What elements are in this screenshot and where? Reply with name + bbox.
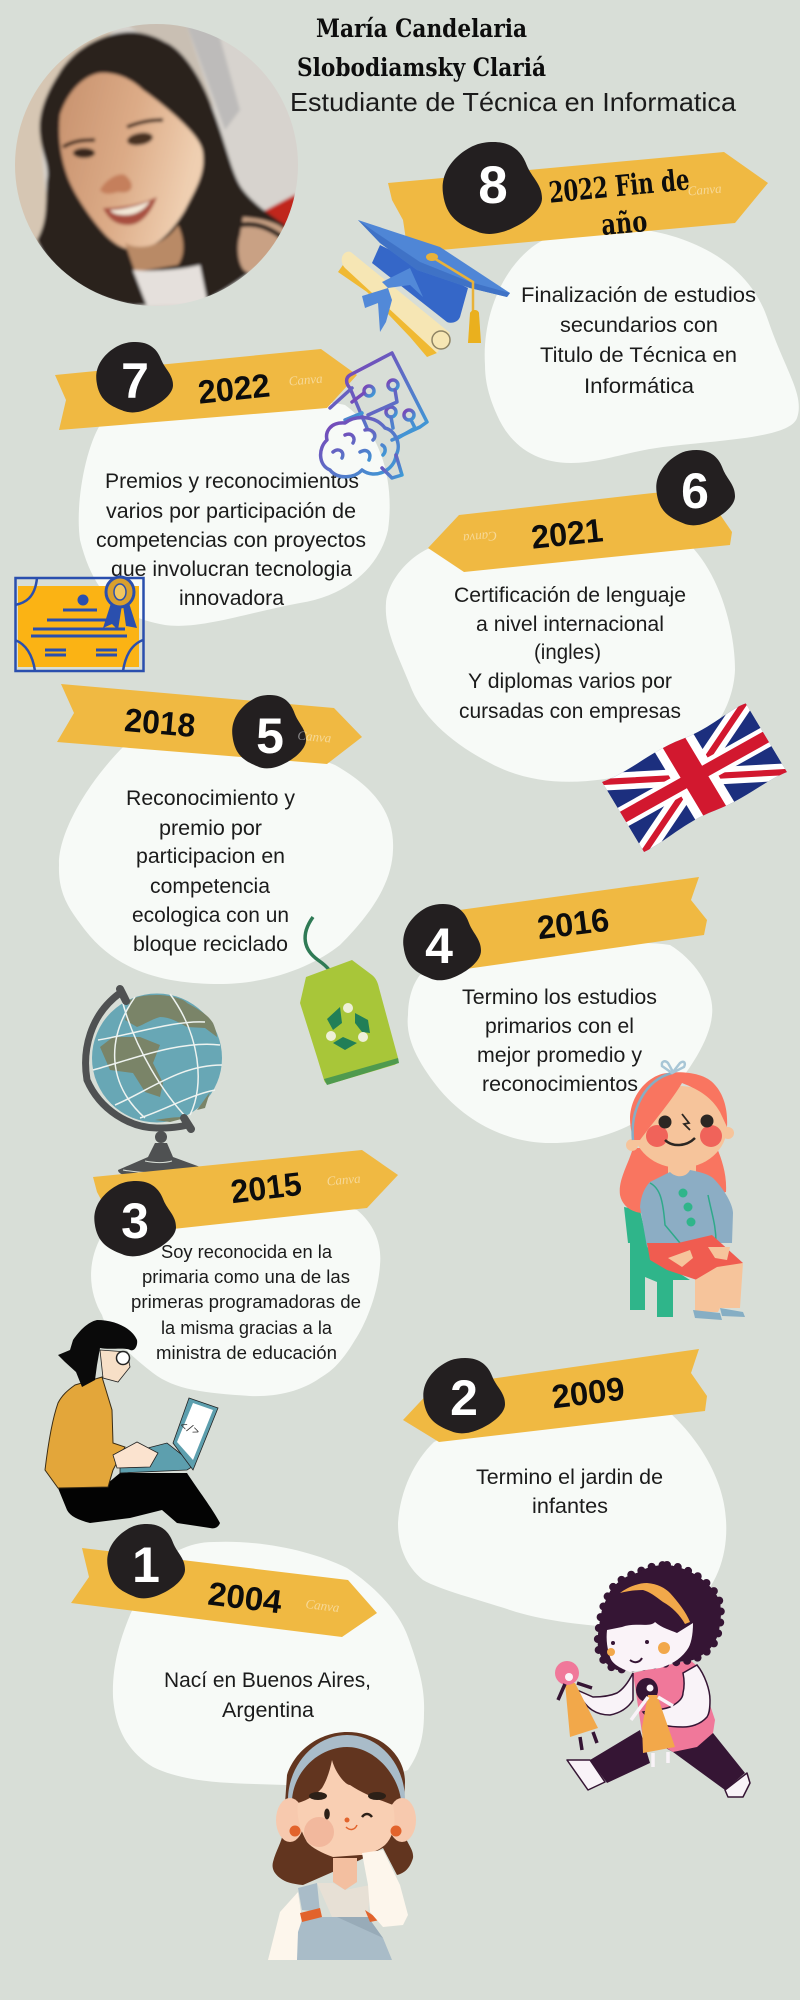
text bubble 3 [91,1205,380,1396]
ribbon 2 [403,1349,707,1442]
number badge 8: 8 [478,156,508,215]
ribbon 1 [71,1548,377,1637]
description 7: competencias con proyectos [96,529,366,552]
watermark 1: Canva [305,1596,341,1615]
number badge 3: 3 [121,1193,149,1249]
panel: 8 - 2022 fin de año [388,142,799,463]
icon: UK flag [602,703,787,852]
portrait photo [10,20,305,312]
number badge 2 [423,1358,505,1433]
description 4: mejor promedio y [477,1044,643,1067]
number badge 5 [232,695,306,768]
number badge 2: 2 [450,1370,478,1426]
description 8 [521,284,756,398]
watermark 6: Canva [462,529,498,546]
ribbon 3 [93,1150,398,1235]
panel: 6 - 2021 [386,450,735,782]
description 6: cursadas con empresas [459,700,681,723]
description 1: Argentina [222,1699,314,1722]
icon: recycling tag [300,917,399,1085]
year label 4: 2016 [535,901,611,946]
text bubble 6 [386,523,735,782]
description 7: Premios y reconocimientos [105,470,359,493]
ribbon 5 [57,684,362,764]
number badge 7: 7 [121,353,149,409]
icon: graduation cap and diploma [338,220,510,357]
description 4 [462,986,657,1096]
year label 8: 2022 Fin de [547,162,691,210]
year label 5: 2018 [123,701,197,744]
description 8: Titulo de Técnica en [540,344,737,367]
description 1 [164,1669,371,1722]
panel: 5 - 2018 [57,684,393,984]
text bubble 7 [79,402,390,626]
text bubble 8 [485,227,799,463]
description 4: reconocimientos [482,1073,638,1096]
description 3 [131,1242,361,1363]
panel: 7 - 2022 [55,342,390,626]
title: Estudiante de Técnica en Informatica [290,87,737,117]
illustration: girl programming on laptop [45,1320,220,1528]
description 3: Soy reconocida en la [161,1242,333,1262]
description 2 [476,1466,663,1518]
number badge 7 [96,342,173,412]
description 8: Informática [584,375,694,398]
number badge 1 [107,1524,185,1598]
watermark 7: Canva [288,371,324,388]
year label 7: 2022 [196,366,272,411]
number badge 1: 1 [132,1537,160,1593]
icon: certificate [15,577,144,671]
description 4: primarios con el [485,1015,634,1038]
description 6: Y diplomas varios por [468,670,672,693]
text bubble 2 [398,1405,726,1627]
year label 6: 2021 [529,511,605,556]
ribbon 7 [55,349,357,430]
title: Slobodiamsky Clariá [297,53,546,82]
description 5: competencia [150,875,270,898]
text bubble 1 [113,1542,424,1786]
watermark 3: Canva [326,1171,362,1188]
number badge 6: 6 [681,463,709,519]
description 6: Certificación de lenguaje [454,584,686,607]
description 5: ecologica con un [132,904,289,927]
watermark 8: Canva [687,181,723,198]
description 5 [126,787,295,956]
watermark 5: Canva [297,728,332,746]
description 6: (ingles) [534,641,601,664]
description 7: que involucran tecnologia [111,558,352,581]
panel: 1 - 2004 [71,1524,424,1786]
icon: brain and circuit [321,353,427,478]
icon: globe [86,989,222,1177]
number badge 5: 5 [256,708,284,764]
panel: 3 - 2015 [91,1150,398,1396]
description 1: Nací en Buenos Aires, [164,1669,371,1692]
number badge 4 [403,904,481,980]
description 6 [454,584,686,723]
ribbon 8 [388,152,768,253]
title [290,14,737,117]
ribbon 6 [428,490,732,572]
description 5: participacion en [136,845,285,868]
panel: 4 - 2016 [403,877,712,1143]
description 3: ministra de educación [156,1343,337,1363]
year label 1: 2004 [206,1575,285,1620]
ribbon 4 [445,877,707,972]
text bubble 5 [59,745,393,984]
number badge 4: 4 [425,918,453,974]
description 5: Reconocimiento y [126,787,295,810]
year label 3: 2015 [229,1165,304,1210]
panel: 2 - 2009 [398,1349,726,1627]
description 5: bloque reciclado [133,933,288,956]
number badge 3 [94,1181,176,1256]
description 3: primeras programadoras de [131,1292,361,1312]
text bubble 4 [408,943,712,1143]
description 6: a nivel internacional [476,613,664,636]
description 7: varios por participación de [106,500,356,523]
illustration: girl with dolls [555,1565,750,1797]
description 5: premio por [159,817,262,840]
description 4: Termino los estudios [462,986,657,1009]
title: María Candelaria [316,14,527,43]
description 2: Termino el jardin de [476,1466,663,1489]
description 8: Finalización de estudios [521,284,756,307]
year label 2: 2009 [550,1370,627,1415]
description 3: primaria como una de las [142,1267,350,1287]
description 7 [96,470,366,610]
description 3: la misma gracias a la [161,1318,333,1338]
year label 8: año [600,204,649,242]
description 7: innovadora [179,587,284,610]
description 2: infantes [532,1495,608,1518]
number badge 6 [656,450,735,525]
illustration: girl with headband [268,1732,416,1960]
illustration: red-haired girl on chair [620,1061,745,1320]
number badge 8 [443,142,542,234]
year label 8 [547,162,691,242]
illustration: girl programming on laptop: </> [178,1421,201,1439]
description 8: secundarios con [560,314,718,337]
